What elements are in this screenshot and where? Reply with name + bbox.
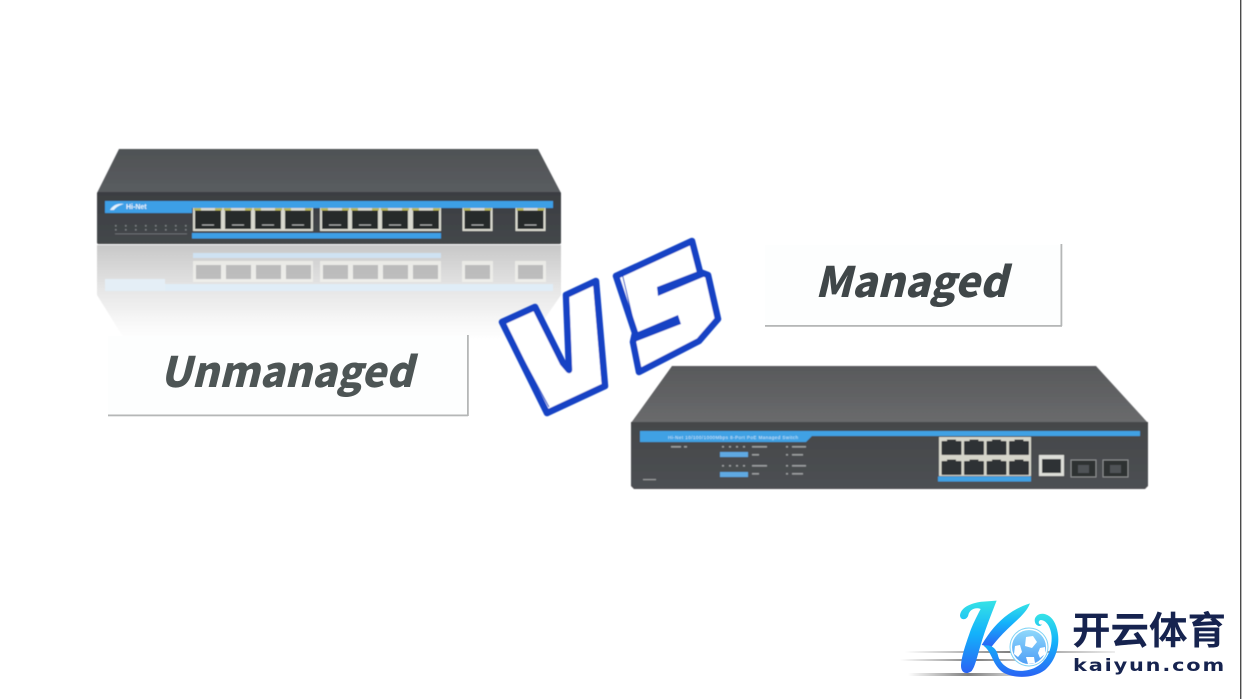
managed LED groups	[643, 446, 806, 480]
logo domain: kaiyun.com	[1073, 656, 1226, 676]
managed model caption: Hi-Net 10/100/1000Mbps 8-Port PoE Managed Switch	[668, 435, 798, 440]
managed switch top face	[631, 366, 1148, 423]
Unmanaged label text: Unmanaged	[160, 339, 419, 400]
logo speed lines	[900, 651, 1115, 676]
managed port label strip	[938, 476, 1031, 482]
managed blue strip	[640, 431, 1140, 442]
unmanaged eight port block	[193, 208, 441, 231]
letter S	[616, 241, 718, 372]
unmanaged brand mark: Hi-Net	[126, 204, 147, 211]
unmanaged switch reflection	[97, 245, 561, 340]
unmanaged switch front panel	[97, 192, 561, 244]
managed switch	[631, 366, 1148, 489]
unmanaged switch top face	[97, 149, 561, 193]
unmanaged brand mark	[110, 204, 147, 211]
unmanaged port label strip	[192, 233, 441, 238]
unmanaged switch	[97, 149, 561, 244]
logo football	[1010, 628, 1048, 666]
kaiyun logo	[900, 601, 1226, 677]
VS emblem	[502, 241, 718, 413]
managed SFP slots	[1071, 460, 1128, 477]
managed switch front panel	[631, 422, 1148, 489]
managed console port	[1039, 455, 1064, 476]
unmanaged blue strip	[105, 201, 553, 213]
label card: Managed	[765, 244, 1062, 327]
label card: Unmanaged	[108, 335, 469, 416]
unmanaged uplink ports	[462, 208, 546, 231]
logo K mark	[960, 601, 1058, 677]
Managed label text: Managed	[815, 249, 1013, 310]
letter V	[502, 281, 605, 413]
unmanaged status LEDs	[115, 225, 187, 234]
managed eight port block	[939, 437, 1031, 476]
logo Chinese wordmark: 开云体育	[1072, 611, 1226, 653]
